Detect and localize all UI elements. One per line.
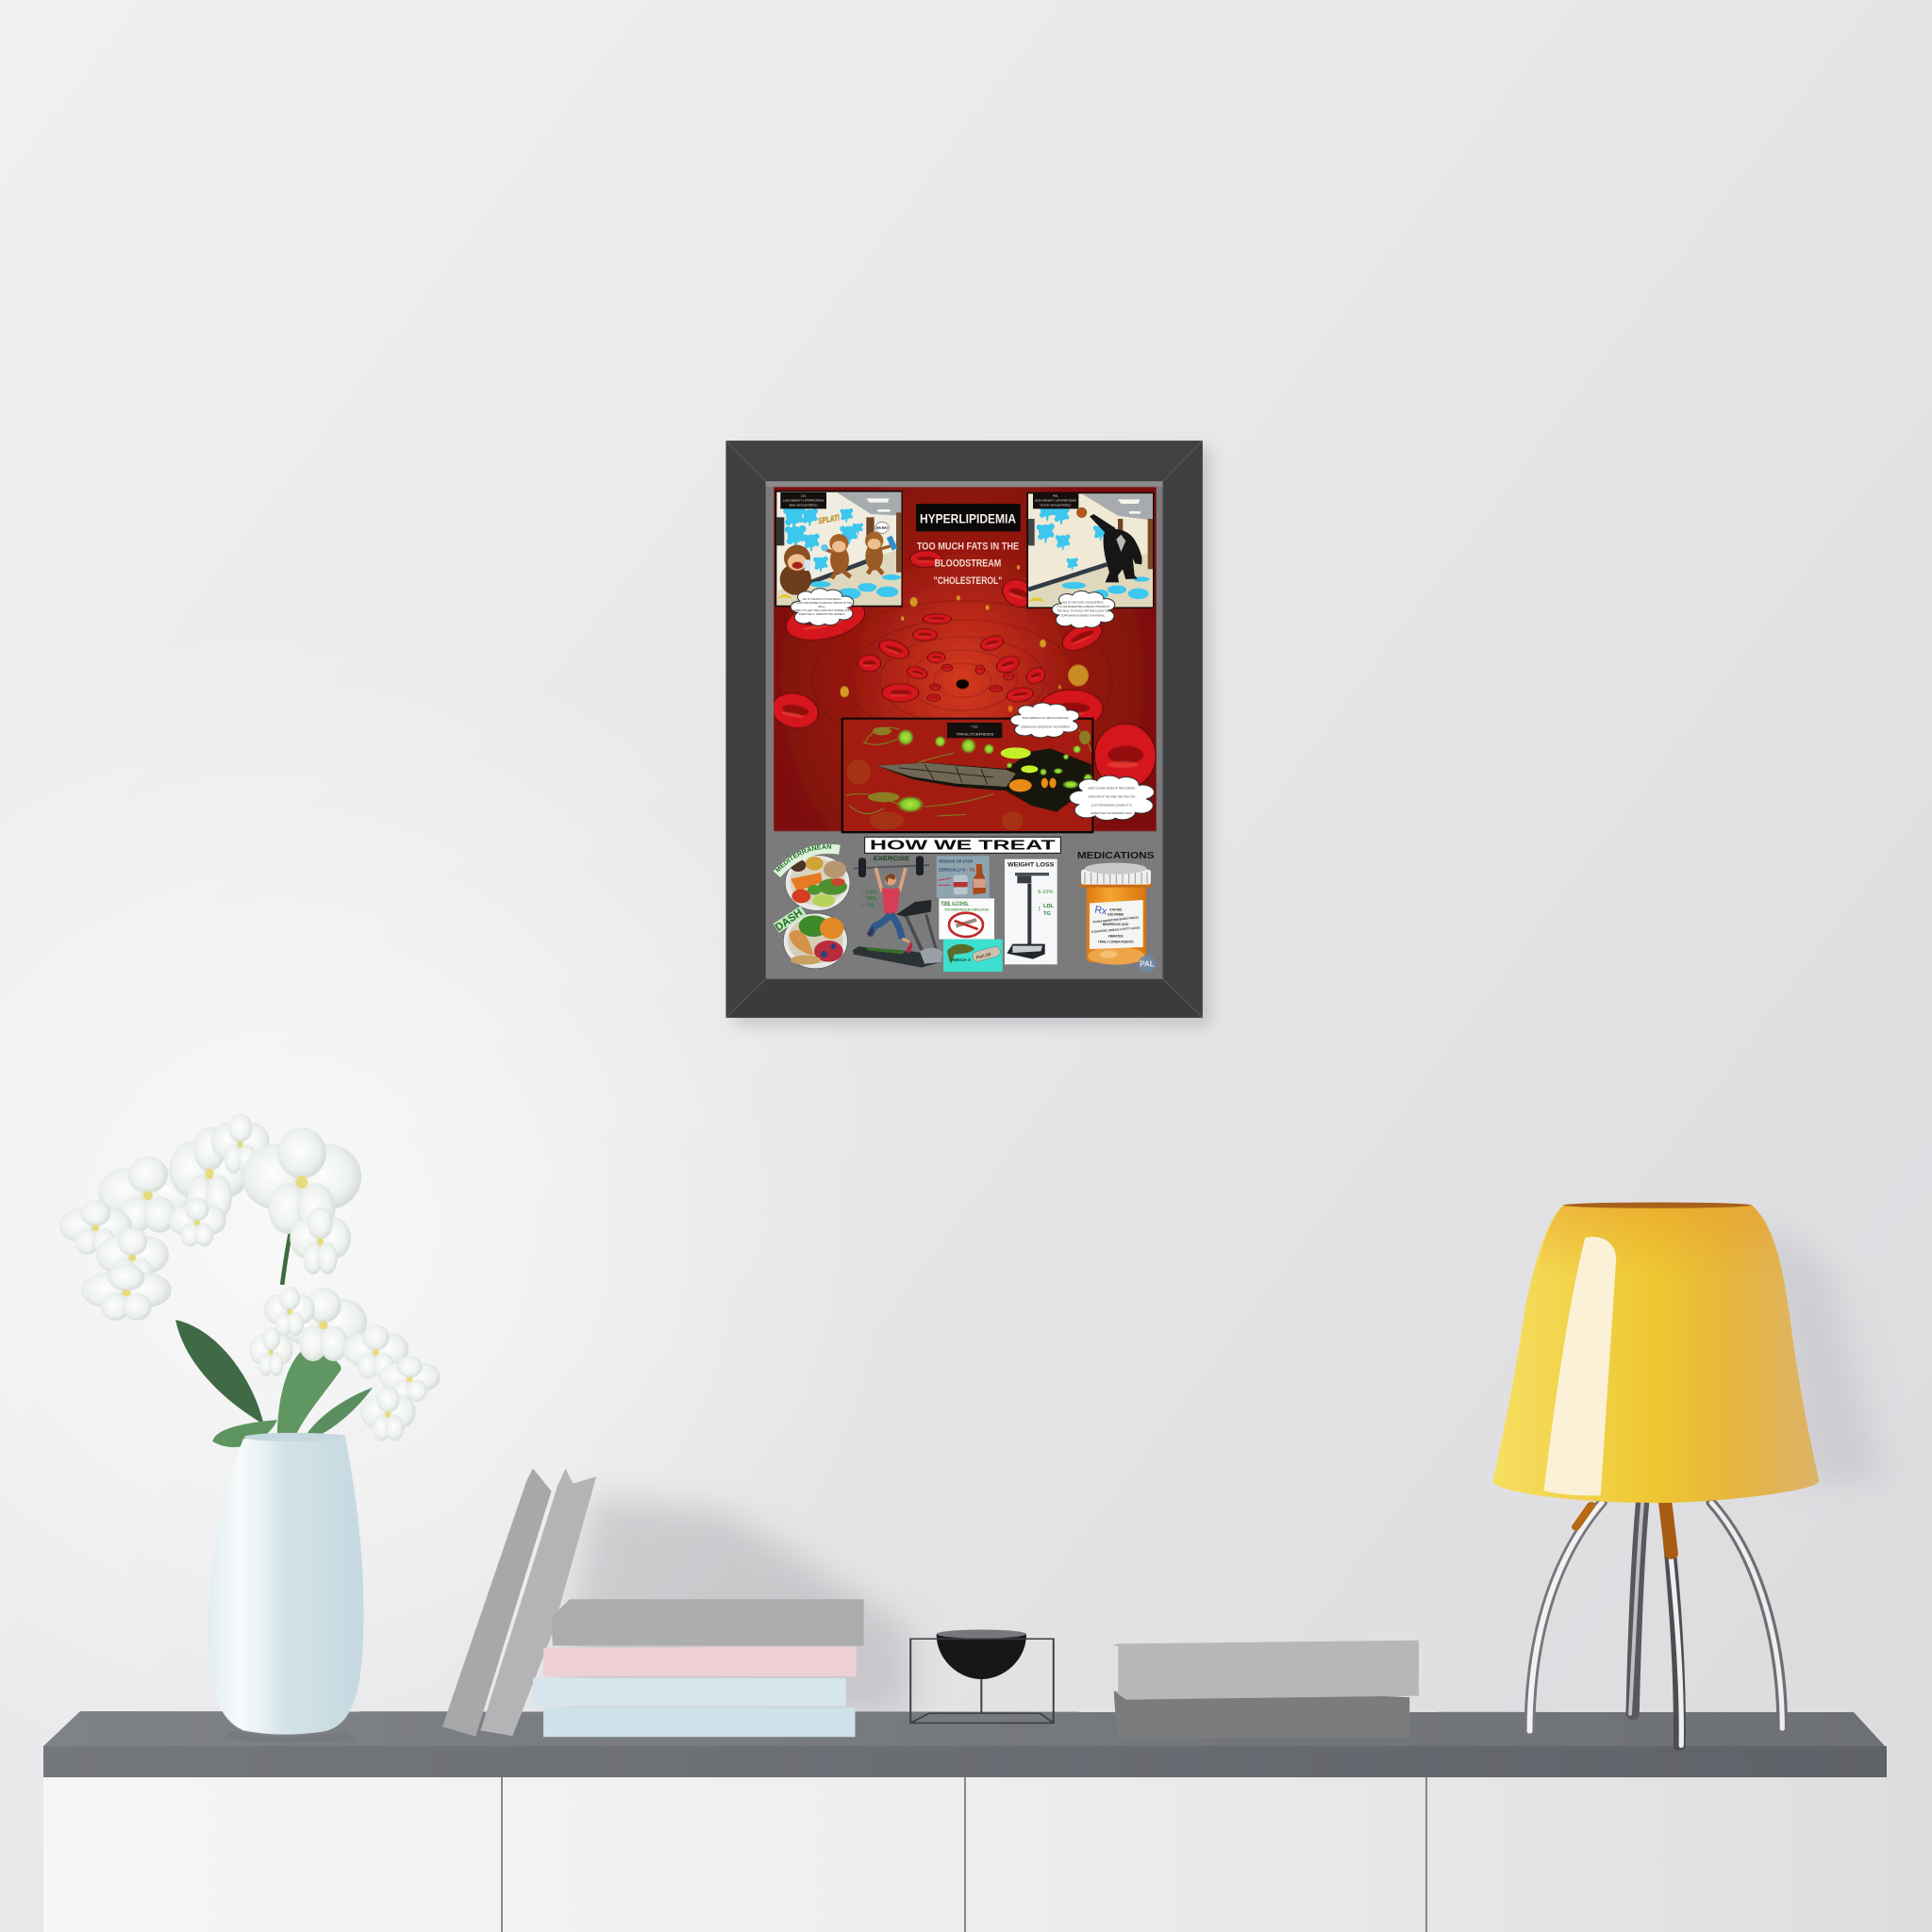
lamp shade (1492, 1203, 1819, 1503)
standing grey books (442, 1469, 596, 1737)
cloud: HDL explanation: HDL IS THE GOOD CHOLESTEROL. (1062, 600, 1105, 604)
subtitle: "CHOLESTEROL" (934, 575, 1002, 587)
title: hyperlipidemia: HYPERLIPIDEMIA (920, 511, 1016, 526)
PAL logo: PAL (1140, 960, 1155, 969)
lipid arrows: TG (867, 904, 874, 909)
cloud: LDL explanation: EVENTUALLY NARROW THE VESSELS (799, 612, 845, 616)
red blood cells (770, 551, 1156, 789)
leaves (175, 1320, 373, 1447)
weight loss box (1005, 859, 1058, 964)
bowl in wire cube (910, 1629, 1054, 1723)
blue paint splats (783, 507, 901, 599)
label: HDL: HDL (1053, 494, 1058, 498)
bottle label: FIBRATES (1108, 935, 1123, 939)
barbell (854, 856, 929, 877)
tobacco box (939, 898, 994, 940)
tobacco box: TOBE. ALCOHOL (941, 901, 969, 908)
label: HDL: HIGH DENSITY LIPOPROTEINS (1035, 499, 1076, 503)
orchid stems (95, 1182, 291, 1285)
cloud: LDL explanation: WALL. (818, 605, 826, 608)
bottle label: BEMPEDOIC ACID (1103, 923, 1129, 926)
cloud: triglycerides float: TRIGLYCERIDES FLOAT THROUGH THE BLOOD (1022, 716, 1069, 720)
comic panel: LDL monkeys (775, 491, 903, 607)
fish oil box: Fish Oil (975, 952, 991, 960)
cloud: pancreas warning: CIRCULATE AT THE SAME TIME THEY CAN (1088, 795, 1135, 799)
yellow lamp (1492, 1203, 1819, 1746)
bottle label: PCSK9 INHIBITORS (INJECTABLE) (1092, 915, 1139, 924)
splat word: SPLAT! (818, 512, 841, 525)
lipid arrows: ↕ (861, 902, 864, 908)
monkey 2 (821, 534, 851, 578)
label: HDL: "GOOD CHOLESTEROL" (1040, 504, 1072, 508)
label: TG (947, 723, 1002, 738)
blue paint splats (1037, 502, 1150, 599)
banana peel (777, 594, 792, 599)
cloud: LDL explanation: WHEN IT'S LEFT THE LOWS WILL HARDEN AND (793, 608, 851, 612)
medical scale (1007, 873, 1049, 959)
lamp legs (1530, 1503, 1782, 1746)
heading: how we treat (865, 837, 1060, 854)
cloud: HDL explanation: IT'S LIKE BASKETBALLS BEING THROWN AT (1057, 605, 1110, 608)
monkey 3 (865, 532, 897, 574)
cloud: HDL explanation (1052, 591, 1115, 628)
lipid arrows: HDL (867, 896, 878, 902)
cloud: pancreas warning (1070, 775, 1154, 820)
weight loss box: ↕ (1038, 904, 1041, 912)
plate: DASH diet: DASH (774, 908, 805, 934)
cloud: HDL explanation: THE WALL TO KNOCK OFF AND CLEAN THE (1058, 609, 1109, 613)
bottle label: STATINS (1109, 908, 1122, 911)
fat droplets (840, 565, 1089, 712)
bottle label (1090, 900, 1143, 949)
fish oil box: OMEGA 3 (949, 958, 971, 963)
cloud: pancreas warning: EFFECTIVELY STOP MAKING FAILS (1091, 811, 1132, 815)
cloud: LDL explanation: IT'S LIKE THE MONKEYS MAKING THROW UP THE (792, 601, 852, 605)
books (442, 1469, 864, 1737)
treadmill (853, 900, 942, 968)
cloud: triglycerides float: STREAM UNTIL DIGESTED BY THE PANCREAS (1021, 725, 1070, 729)
bottle label: TRIGLY LOWER AGENTS (1098, 940, 1134, 943)
plate: mediterranean diet (774, 843, 851, 911)
comic panel: triglycerides (841, 703, 1154, 833)
label: LDL: LDL (801, 494, 807, 498)
cloud: triglycerides float (1010, 703, 1079, 738)
capsule clusters (868, 727, 1091, 802)
framed poster (725, 440, 1216, 1031)
label: LDL (780, 492, 826, 508)
basketball (1076, 508, 1087, 518)
vines (846, 727, 1091, 816)
bottle label: ICOSAPENT, OMEGA-3 FATTY ACIDS (1091, 925, 1140, 934)
PAL logo (1139, 955, 1156, 973)
stacked books (533, 1599, 864, 1737)
weight loss box: 5-10% (1038, 890, 1054, 895)
subtitle: BLOODSTREAM (935, 558, 1001, 570)
label: LDL: "BAD CHOLESTEROL" (789, 504, 818, 508)
prescription bottle (1080, 863, 1152, 965)
weight loss box: LDL (1043, 904, 1055, 909)
bottle label: EZETIMIBE (1108, 913, 1124, 917)
right grey books (1114, 1641, 1419, 1738)
green fat globules (896, 728, 1093, 813)
orchid blossoms (59, 1114, 441, 1441)
gorilla (1090, 514, 1142, 582)
label: TG: TRIGLYCERIDES (956, 732, 994, 736)
comic panel: HDL gorilla (1026, 492, 1154, 608)
subtitle (917, 541, 1019, 587)
speech: ha ha: HA HA! (876, 525, 888, 530)
heading: how we treat: HOW WE TREAT (870, 839, 1056, 854)
runner (867, 868, 912, 954)
bottle label: Rx (1093, 904, 1108, 918)
label: LDL: LOW DENSITY LIPOPROTEINS (783, 499, 824, 503)
lipid arrows (861, 889, 878, 909)
title block (916, 504, 1021, 587)
fire glow (1009, 778, 1057, 791)
comic clouds: cholesterol explanations (791, 589, 1115, 628)
plate: mediterranean diet: MEDITERRANEAN (775, 843, 832, 873)
lamp wall shadow (1755, 1213, 1884, 1486)
lipid arrows: ↕ (861, 889, 864, 895)
poster drop shadow (734, 448, 1210, 1025)
exercise: weightlifting runner on treadmill (853, 856, 942, 968)
exercise label: EXERCISE (874, 856, 910, 862)
lipid vessel body (877, 748, 1091, 812)
weight loss box: TG (1043, 911, 1051, 917)
alcohol box: ↕ TG (966, 868, 975, 873)
wall shadow behind books (555, 1495, 912, 1717)
tobacco box: STOP CARDIOVASCULAR COMPLICATIONS (944, 908, 990, 912)
weight loss box: WEIGHT LOSS (1008, 862, 1055, 869)
treatment section (774, 836, 1157, 973)
cloud: pancreas warning: WHEN TOO MANY PIECES OF TRIGLYCERIDES (1088, 787, 1135, 791)
orchid and vase (59, 1114, 441, 1743)
alcohol box (937, 856, 990, 898)
subtitle: TOO MUCH FATS IN THE (917, 541, 1019, 553)
vase (208, 1433, 363, 1743)
heading: medications: MEDICATIONS (1077, 851, 1155, 861)
shelf top (43, 1711, 1887, 1777)
plate: DASH diet (774, 908, 847, 969)
cloud: LDL explanation: LDL IS THE BAD CHOLESTEROL. (803, 597, 841, 601)
cloud: pancreas warning: CLOG THE PANCREAS CAUSING IT TO (1091, 803, 1133, 807)
cloud: HDL explanation: SUPPORATIVE DRIVEN IT MATERIAL. (1061, 613, 1106, 617)
alcohol box: ESPECIALLY IF (939, 867, 966, 872)
cabinet with door seams (43, 1777, 1887, 1932)
label: TG: "TG" (971, 725, 979, 729)
no smoking sign (949, 913, 983, 937)
monkey 1 seated (780, 545, 811, 595)
red artery panel (770, 487, 1157, 831)
frame (725, 441, 1203, 1018)
lipid arrows: LDL (867, 890, 877, 895)
alcohol box: REDUCE OR STOP (939, 859, 973, 864)
fish oil box (943, 940, 1003, 972)
cloud: LDL explanation (791, 589, 854, 625)
label: HDL (1033, 493, 1078, 508)
